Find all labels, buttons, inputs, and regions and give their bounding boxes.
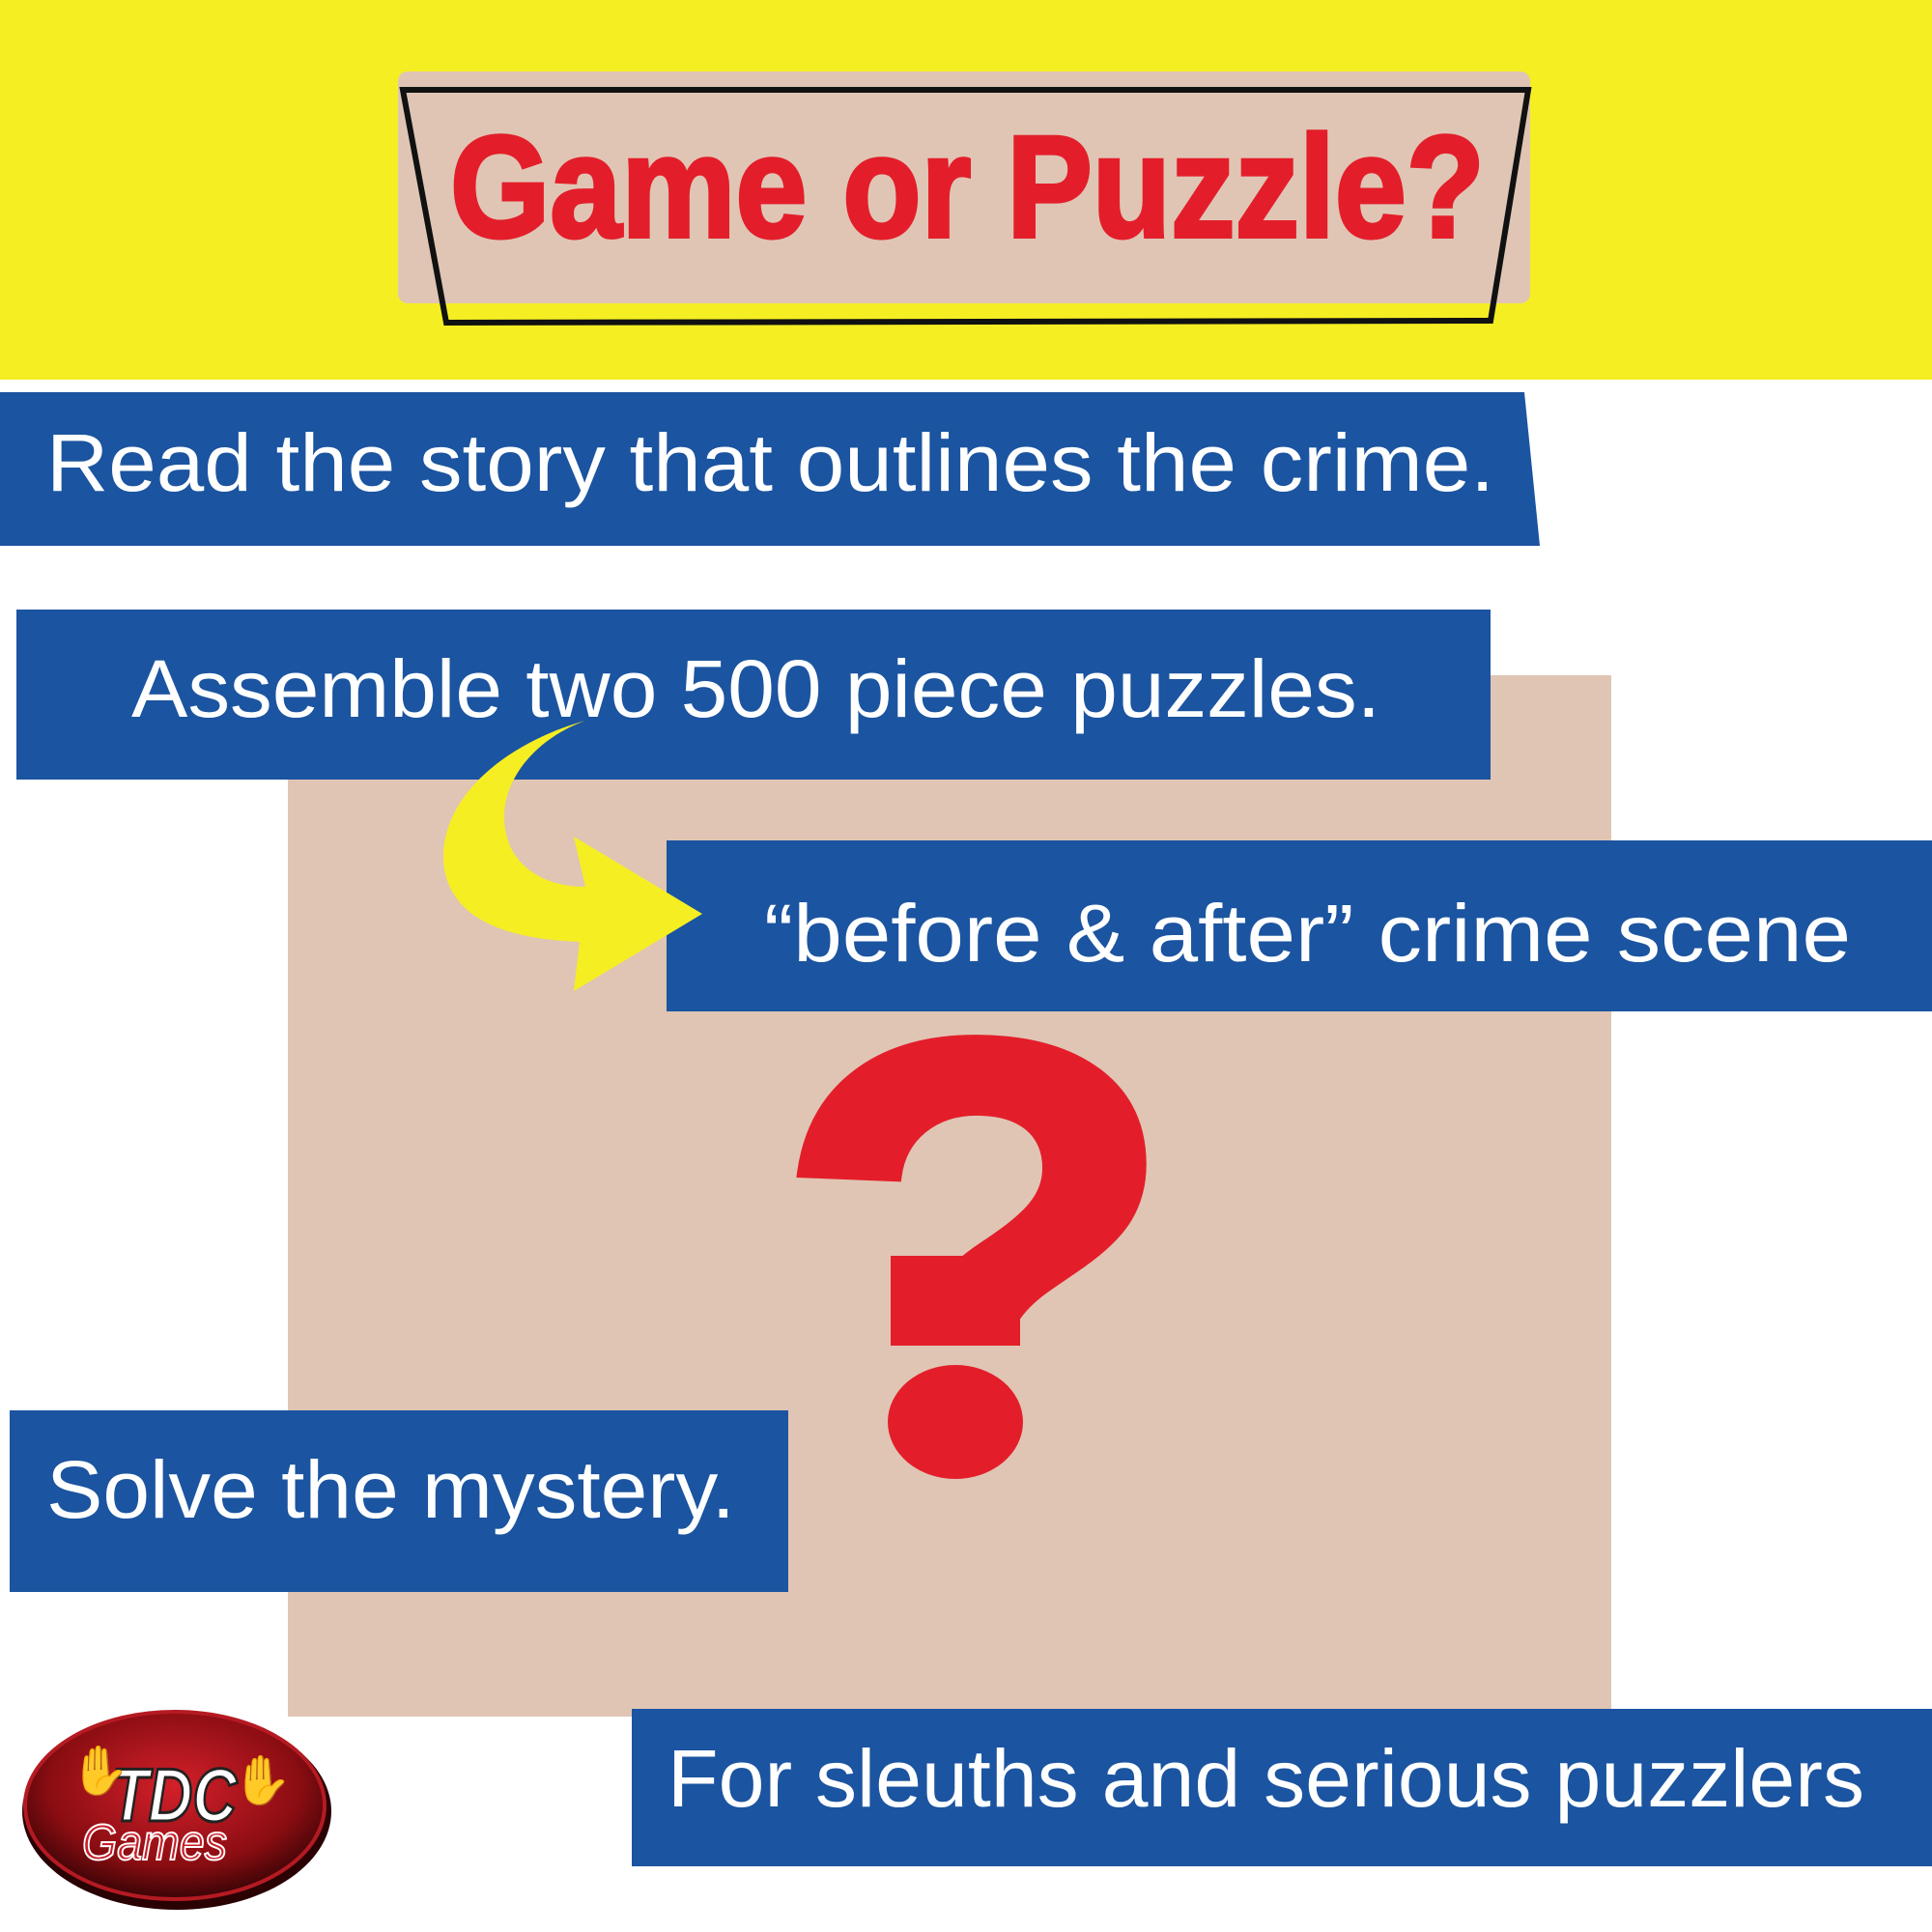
icon: question mark bbox=[796, 1035, 1147, 1479]
logo: TDC Games: ✋ bbox=[232, 1752, 292, 1807]
logo: TDC Games bbox=[22, 1712, 331, 1910]
step 3 bar bbox=[667, 840, 1932, 1011]
beige background square bbox=[288, 675, 1611, 1717]
icon: question mark: ? bbox=[773, 911, 1179, 1612]
step 4 bar bbox=[10, 1410, 788, 1592]
yellow header band bbox=[0, 0, 1932, 380]
step 1 bar bbox=[0, 392, 1540, 546]
step 1 bar: Read the story that outlines the crime. bbox=[46, 417, 1494, 508]
step 2 bar bbox=[16, 610, 1491, 780]
logo: TDC Games: TDC bbox=[111, 1752, 238, 1837]
step 3 bar: “before & after” crime scene bbox=[764, 888, 1851, 979]
title box bbox=[398, 71, 1530, 323]
step 5 bar: For sleuths and serious puzzlers bbox=[668, 1733, 1864, 1824]
logo: TDC Games: Games bbox=[82, 1815, 227, 1871]
step 2 bar: Assemble two 500 piece puzzles. bbox=[131, 643, 1380, 734]
title text: Game or Puzzle? bbox=[450, 105, 1485, 268]
step 5 bar bbox=[632, 1709, 1932, 1866]
logo: TDC Games: ✋ bbox=[70, 1743, 129, 1798]
arrow: yellow curved bbox=[443, 721, 702, 991]
step 4 bar: Solve the mystery. bbox=[46, 1444, 735, 1535]
